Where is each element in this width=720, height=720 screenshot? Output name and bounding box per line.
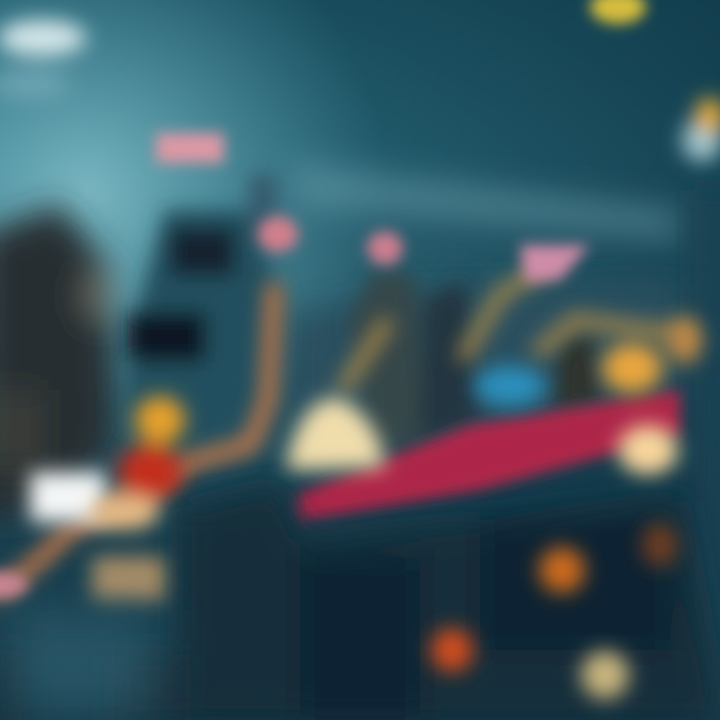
colourful badge at right edge: [682, 98, 720, 162]
lower-left street tone: [0, 610, 160, 720]
central building: [125, 175, 285, 470]
white panel lower left: [30, 472, 106, 522]
cream dome: [285, 398, 385, 470]
tall building at right edge: [695, 190, 720, 720]
orange rising chart line: [0, 270, 680, 592]
distant hazy skyline: [290, 285, 680, 460]
white cloud: [0, 20, 86, 98]
light streak across the sky: [290, 165, 680, 240]
yellow glowing lights on red band: [602, 316, 702, 475]
mid-distance towers: [350, 270, 600, 450]
dark building on the left: [0, 205, 115, 520]
pink chart markers: [0, 216, 590, 598]
pink flag: [156, 133, 224, 163]
red rising band: [296, 390, 680, 522]
foreground light spots: [431, 523, 678, 699]
dark foreground buildings: [0, 485, 720, 720]
red and orange glow: [89, 396, 185, 601]
blue block: [474, 366, 546, 406]
yellow sun: [590, 0, 646, 24]
